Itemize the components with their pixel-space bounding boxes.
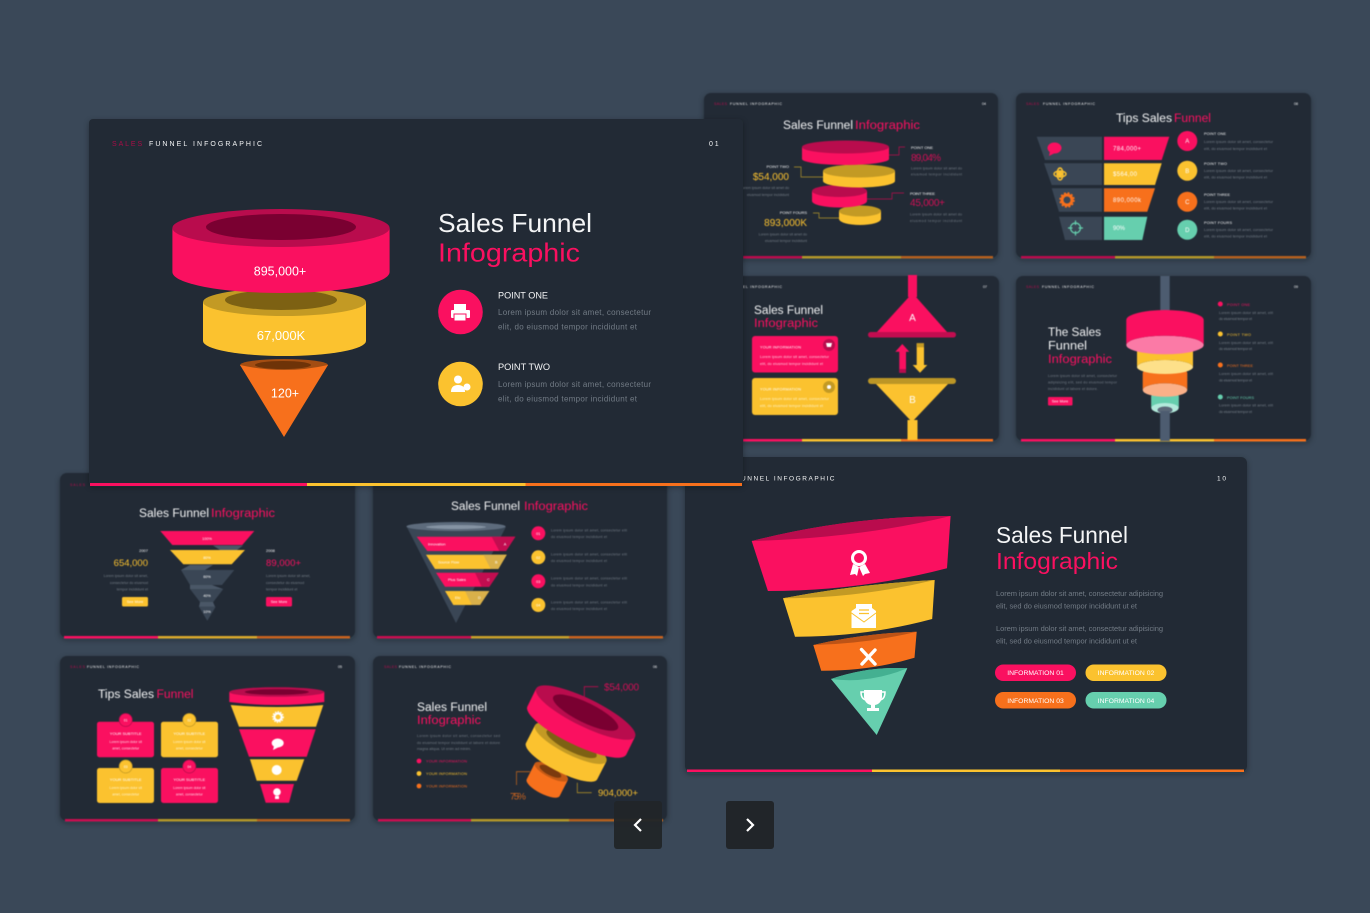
card 02: Lorem ipsum dolor sit — [173, 740, 206, 744]
heading: Sales Funnel — [417, 702, 487, 714]
numbered points: 03 — [536, 580, 540, 584]
title: Infographic — [996, 548, 1118, 574]
right stat: 89,000+ — [266, 558, 301, 569]
stacked rings — [1126, 310, 1204, 414]
body text — [417, 734, 500, 751]
slide 04: funnel with four points — [704, 93, 998, 258]
point four: Lorem ipsum dolor sit amet do — [759, 232, 807, 236]
icon: trophy — [861, 690, 885, 711]
body text: elit, sed do eiusmod tempor incididunt ut et — [996, 636, 1138, 646]
point texts: elit, do eiusmod tempor incididunt et — [1204, 234, 1268, 238]
card 01: YOUR SUBTITLE — [110, 731, 142, 736]
numbered points: Lorem ipsum dolor sit amet, consectetur elit — [551, 528, 627, 532]
funnel tip: orange — [240, 359, 328, 437]
body text: elit, sed do eiusmod tempor incididunt ut et — [996, 602, 1138, 610]
icon: tools — [862, 650, 875, 664]
body text — [1048, 374, 1118, 391]
callout: 75% — [510, 772, 530, 802]
pink info card: Lorem ipsum dolor sit amet, consectetur — [760, 355, 830, 359]
right button: See More — [271, 600, 287, 604]
funnel tier: yellow: 67,000K — [257, 328, 306, 343]
funnel tip: teal — [831, 668, 907, 735]
funnel rows: $564,00 — [1113, 172, 1138, 178]
right button — [266, 597, 292, 606]
heading — [754, 305, 823, 330]
right points: Lorem ipsum dolor sit amet, elit — [1219, 311, 1274, 315]
point two: elit, do eiusmod tempor incididunt et — [498, 394, 638, 404]
slide 09: the sales funnel with pole: SALES — [1026, 285, 1040, 289]
letter badges: C — [1185, 200, 1190, 206]
funnel with ribbons: Source Flow — [438, 560, 459, 564]
stacked cylinders — [802, 140, 895, 225]
title: Sales Funnel — [996, 522, 1128, 548]
point one: POINT ONE — [498, 290, 548, 300]
heading: Sales Funnel — [451, 501, 520, 513]
heading: Funnel — [1174, 113, 1211, 125]
numbered points: 02 — [536, 556, 540, 560]
numbered points: Lorem ipsum dolor sit amet, consectetur elit — [551, 576, 627, 580]
heading — [98, 689, 194, 701]
slide 06: tilted funnel: FUNNEL INFOGRAPHIC — [399, 665, 451, 669]
right points: Lorem ipsum dolor sit amet, elit — [1219, 372, 1274, 376]
funnel layers: 10% — [203, 610, 211, 614]
yellow info card — [752, 378, 838, 415]
right points: do eiusmod tempor et — [1219, 378, 1253, 382]
body text: do eiusmod tempor incididunt ut labore et dolore — [417, 741, 500, 745]
legend — [417, 759, 467, 788]
slide 06: tilted funnel: 06 — [653, 665, 657, 669]
funnel with ribbons: A — [504, 542, 507, 546]
heading: Sales Funnel — [783, 120, 853, 132]
right points: do eiusmod tempor et — [1219, 410, 1253, 414]
heading — [1048, 327, 1112, 366]
funnel layers: 80% — [203, 556, 211, 560]
slide 08: tips sales funnel — [1016, 93, 1311, 258]
letter badges — [1177, 131, 1197, 240]
point one: Lorem ipsum dolor sit amet do — [911, 166, 962, 170]
point two: Lorem ipsum dolor sit amet, consectetur — [498, 380, 651, 389]
pole — [1160, 276, 1170, 441]
legend: YOUR INFORMATION — [426, 784, 467, 788]
button — [1048, 397, 1072, 406]
card 02 — [161, 714, 218, 757]
slide 04: funnel with four points: FUNNEL INFOGRAPHIC — [730, 102, 782, 106]
card 01 — [97, 714, 154, 757]
callout: $54,000: $54,000 — [604, 682, 639, 694]
slide 01: main sales funnel — [89, 119, 743, 486]
funnel with ribbons: Innovation — [428, 542, 446, 546]
point four — [759, 210, 807, 243]
funnel with ribbons: B — [495, 560, 498, 564]
body text: magna aliqua. Ut enim ad minim. — [417, 747, 471, 751]
heading — [1116, 113, 1211, 125]
funnel with ribbons — [406, 522, 515, 623]
card 04: 04 — [187, 765, 191, 769]
point four: eiusmod tempor incididunt — [765, 239, 807, 243]
funnel A — [868, 275, 956, 338]
card 02: YOUR SUBTITLE — [173, 731, 206, 736]
numbered points — [531, 526, 627, 612]
left button — [122, 597, 148, 606]
heading: Infographic — [417, 715, 481, 727]
slide 04: funnel with four points: SALES — [714, 102, 728, 106]
point texts: POINT TWO — [1204, 162, 1227, 166]
legend: YOUR INFORMATION — [426, 772, 467, 776]
heading: Infographic — [211, 508, 275, 520]
funnel tip: orange: 120+ — [271, 386, 299, 400]
header — [112, 141, 720, 148]
yellow info card: YOUR INFORMATION — [760, 388, 801, 392]
left stat: 2007 — [139, 548, 149, 553]
arrow up — [895, 344, 909, 373]
right points: POINT TWO — [1227, 333, 1251, 337]
pink info card: elit, do eiusmod tempor incididunt et — [760, 362, 823, 366]
callout: 75%: 75% — [510, 792, 527, 802]
slide 05: tips cards and funnel: 05 — [338, 665, 342, 669]
point one: 89,04% — [911, 153, 941, 164]
funnel layers: 100% — [202, 537, 212, 541]
header: SALES — [112, 141, 144, 148]
point two — [741, 164, 789, 197]
funnel band: yellow — [783, 580, 935, 637]
body text: adipisicing elit, sed do eiusmod tempor — [1048, 380, 1118, 384]
right points: POINT ONE — [1227, 303, 1250, 307]
letter badges: A — [1185, 139, 1189, 145]
title: Infographic — [438, 238, 580, 268]
card 01: 01 — [124, 718, 128, 722]
info pills — [995, 664, 1166, 708]
point three: 45,000+ — [910, 198, 945, 209]
heading: Infographic — [1048, 354, 1112, 366]
slide 09: the sales funnel with pole: 09 — [1294, 285, 1298, 289]
card 03: 03 — [124, 765, 128, 769]
title: Sales Funnel — [438, 208, 592, 238]
point two — [438, 362, 651, 406]
point three — [910, 191, 962, 223]
slide 05: tips cards and funnel: SALES — [70, 665, 86, 669]
point two: POINT TWO — [766, 164, 789, 169]
slide 06: tilted funnel — [373, 656, 667, 822]
right points: POINT THREE — [1227, 364, 1253, 368]
card 01: amet, consectetur — [112, 746, 140, 750]
point one: eiusmod tempor incididunt — [911, 172, 962, 176]
point two: $54,000 — [753, 172, 789, 183]
callout: 904,000+ — [577, 783, 638, 799]
heading: Infographic — [754, 318, 818, 330]
funnel rows — [1037, 137, 1169, 240]
point texts: Lorem ipsum dolor sit amet, consectetur — [1204, 169, 1274, 173]
point texts: POINT THREE — [1204, 193, 1230, 197]
body text: Lorem ipsum dolor sit amet, consectetur — [1048, 374, 1118, 378]
icon: envelope — [852, 604, 876, 628]
right stat: Lorem ipsum dolor sit amet, — [266, 574, 310, 578]
left stat: consectetur do eiusmod — [110, 581, 148, 585]
left button: See More — [127, 600, 143, 604]
card 03: amet, consectetur — [112, 792, 140, 796]
heading: Tips Sales — [1116, 113, 1172, 125]
numbered points: do eiusmod tempor incididunt et — [551, 607, 607, 611]
leader lines — [794, 147, 905, 218]
funnel B — [868, 378, 956, 440]
pink info card — [752, 336, 838, 372]
right stat: consectetur do eiusmod — [266, 581, 304, 585]
funnel A: A — [909, 313, 916, 324]
slide 03: ribbon funnel — [373, 473, 667, 638]
slide 10: large 3D funnel — [685, 457, 1247, 772]
right stat: tempor incididunt et — [266, 588, 297, 592]
slide 02: percentage funnel — [60, 473, 355, 638]
previous arrow button — [614, 801, 662, 849]
header: 01 — [709, 141, 720, 148]
card 04: Lorem ipsum dolor sit — [173, 786, 206, 790]
funnel with ribbons: Plus Sales — [448, 578, 466, 582]
numbered points: 04 — [536, 604, 540, 608]
funnel layers — [160, 531, 254, 621]
icon: gear — [1060, 193, 1074, 207]
numbered points: do eiusmod tempor incididunt et — [551, 535, 607, 539]
icon: atom — [1054, 168, 1066, 180]
funnel rows: 784,000+ — [1113, 146, 1141, 152]
slide 09: the sales funnel with pole: FUNNEL INFOGRAPHIC — [1042, 285, 1094, 289]
yellow info card: Lorem ipsum dolor sit amet, consectetur — [760, 397, 830, 401]
heading: Infographic — [524, 501, 588, 513]
point one — [911, 145, 962, 176]
icon: speech bubble — [1048, 142, 1062, 156]
heading — [451, 501, 588, 513]
slide 08: tips sales funnel: 08 — [1294, 102, 1298, 106]
funnel with ribbons: D — [478, 596, 481, 600]
funnel rows: 90% — [1113, 226, 1126, 232]
left stat: Lorem ipsum dolor sit amet, — [104, 574, 148, 578]
icon: target — [1068, 220, 1083, 236]
heading: Funnel — [1048, 340, 1087, 352]
info pills: INFORMATION 02 — [1098, 670, 1154, 677]
funnel layers: 60% — [203, 575, 211, 579]
slide 06: tilted funnel: SALES — [384, 665, 398, 669]
numbered points: Lorem ipsum dolor sit amet, consectetur elit — [551, 552, 627, 556]
yellow info card: elit, do eiusmod tempor incididunt et — [760, 404, 823, 408]
card 03: Lorem ipsum dolor sit — [109, 786, 142, 790]
legend: YOUR INFORMATION — [426, 760, 467, 764]
slide 04: funnel with four points: 04 — [982, 102, 986, 106]
point texts: POINT FOURS — [1204, 221, 1232, 225]
body text: incididunt ut labore et dolore. — [1048, 387, 1098, 391]
right stat — [266, 548, 310, 592]
progress bar — [90, 483, 742, 486]
tilted cylinders — [521, 676, 641, 801]
point four: 893,000K — [764, 218, 807, 229]
slide 07: A to B funnels: FUNNEL INFOGRAPHIC — [730, 285, 782, 289]
segmented funnel — [229, 687, 324, 803]
title — [438, 208, 592, 268]
numbered points: do eiusmod tempor incididunt et — [551, 559, 607, 563]
point three: Lorem ipsum dolor sit amet do — [910, 212, 962, 216]
body text — [996, 589, 1163, 646]
funnel layers: 40% — [203, 594, 211, 598]
point one: Lorem ipsum dolor sit amet, consectetur — [498, 308, 651, 317]
card 02: amet, consectetur — [176, 746, 204, 750]
callout: 904,000+: 904,000+ — [598, 788, 638, 799]
body text: Lorem ipsum dolor sit amet, consectetur adipisicing — [996, 624, 1163, 633]
point texts: elit, do eiusmod tempor incididunt et — [1204, 176, 1268, 180]
header: 10 — [1217, 476, 1228, 482]
header: FUNNEL INFOGRAPHIC — [149, 141, 264, 148]
funnel with ribbons: C — [487, 578, 490, 582]
point texts: elit, do eiusmod tempor incididunt et — [1204, 147, 1268, 151]
heading — [139, 508, 275, 520]
card 04: YOUR SUBTITLE — [173, 777, 206, 782]
funnel band: pink — [752, 516, 951, 591]
heading: Sales Funnel — [754, 305, 823, 317]
next arrow button — [726, 801, 774, 849]
header: FUNNEL INFOGRAPHIC — [736, 476, 835, 482]
slide 05: tips cards and funnel — [60, 656, 355, 822]
left stat: 654,000 — [114, 558, 148, 569]
heading: Funnel — [156, 689, 194, 701]
card 03 — [97, 760, 154, 803]
slide 09: the sales funnel with pole — [1016, 276, 1311, 442]
funnel with ribbons: Etc — [455, 596, 461, 600]
right stat: 2008 — [266, 548, 276, 553]
funnel tier: pink: 895,000+ — [254, 264, 306, 278]
right points — [1218, 302, 1274, 414]
funnel tier: yellow — [203, 288, 366, 356]
card 04 — [161, 760, 218, 803]
heading: Tips Sales — [98, 689, 154, 701]
card 02: 02 — [187, 718, 191, 722]
pink info card: YOUR INFORMATION — [760, 346, 801, 350]
funnel band: orange — [813, 632, 917, 671]
slide 07: A to B funnels — [704, 275, 999, 442]
heading: Infographic — [855, 120, 920, 132]
point one — [438, 290, 651, 334]
icon: award — [850, 552, 870, 576]
body text: Lorem ipsum dolor sit amet, consectetur sed — [417, 734, 500, 738]
header — [736, 476, 1228, 482]
point one: POINT ONE — [911, 145, 933, 150]
slide 02: percentage funnel: SALES — [70, 483, 86, 487]
heading — [783, 120, 920, 132]
right points: Lorem ipsum dolor sit amet, elit — [1219, 404, 1274, 408]
point texts: Lorem ipsum dolor sit amet, consectetur — [1204, 140, 1274, 144]
card 04: amet, consectetur — [176, 792, 204, 796]
info pills: INFORMATION 03 — [1007, 698, 1064, 705]
letter badges: D — [1185, 228, 1190, 234]
info pills: INFORMATION 01 — [1007, 670, 1064, 677]
body text: Lorem ipsum dolor sit amet, consectetur adipisicing — [996, 589, 1163, 598]
funnel tier: pink — [172, 209, 390, 293]
letter badges: B — [1185, 169, 1189, 175]
numbered points: Lorem ipsum dolor sit amet, consectetur elit — [551, 600, 627, 604]
point texts — [1204, 132, 1274, 238]
right points: Lorem ipsum dolor sit amet, elit — [1219, 341, 1274, 345]
arrow down — [913, 343, 927, 373]
numbered points: 01 — [536, 532, 540, 536]
slide 05: tips cards and funnel: FUNNEL INFOGRAPHIC — [87, 665, 139, 669]
heading: Sales Funnel — [139, 508, 209, 520]
right points: do eiusmod tempor et — [1219, 347, 1253, 351]
point one: elit, do eiusmod tempor incididunt et — [498, 322, 638, 332]
left stat — [104, 548, 149, 592]
slide 07: A to B funnels: 07 — [983, 285, 987, 289]
point texts: Lorem ipsum dolor sit amet, consectetur — [1204, 200, 1274, 204]
funnel rows: 890,000k — [1113, 198, 1142, 204]
point texts: Lorem ipsum dolor sit amet, consectetur — [1204, 228, 1274, 232]
slide 08: tips sales funnel: FUNNEL INFOGRAPHIC — [1043, 102, 1095, 106]
left stat: tempor incididunt et — [117, 588, 148, 592]
right points: POINT FOURS — [1227, 396, 1254, 400]
slide 08: tips sales funnel: SALES — [1026, 102, 1040, 106]
info pills: INFORMATION 04 — [1098, 698, 1154, 705]
title — [996, 522, 1128, 574]
funnel B: B — [909, 395, 916, 406]
point four: POINT FOURS — [780, 210, 807, 215]
point three: POINT THREE — [910, 191, 935, 196]
card 01: Lorem ipsum dolor sit — [109, 740, 142, 744]
point three: eiusmod tempor incididunt — [910, 219, 962, 223]
right points: do eiusmod tempor et — [1219, 317, 1253, 321]
card 03: YOUR SUBTITLE — [110, 777, 142, 782]
point texts: elit, do eiusmod tempor incididunt et — [1204, 206, 1268, 210]
button: See More — [1052, 400, 1068, 404]
heading — [417, 702, 487, 727]
point two: Lorem ipsum dolor sit amet do — [741, 186, 789, 190]
heading: The Sales — [1048, 327, 1101, 339]
point texts: POINT ONE — [1204, 132, 1226, 136]
point two: POINT TWO — [498, 362, 550, 372]
numbered points: do eiusmod tempor incididunt et — [551, 584, 607, 588]
callout: $54,000 — [584, 682, 639, 699]
point two: eiusmod tempor incididunt — [747, 193, 789, 197]
